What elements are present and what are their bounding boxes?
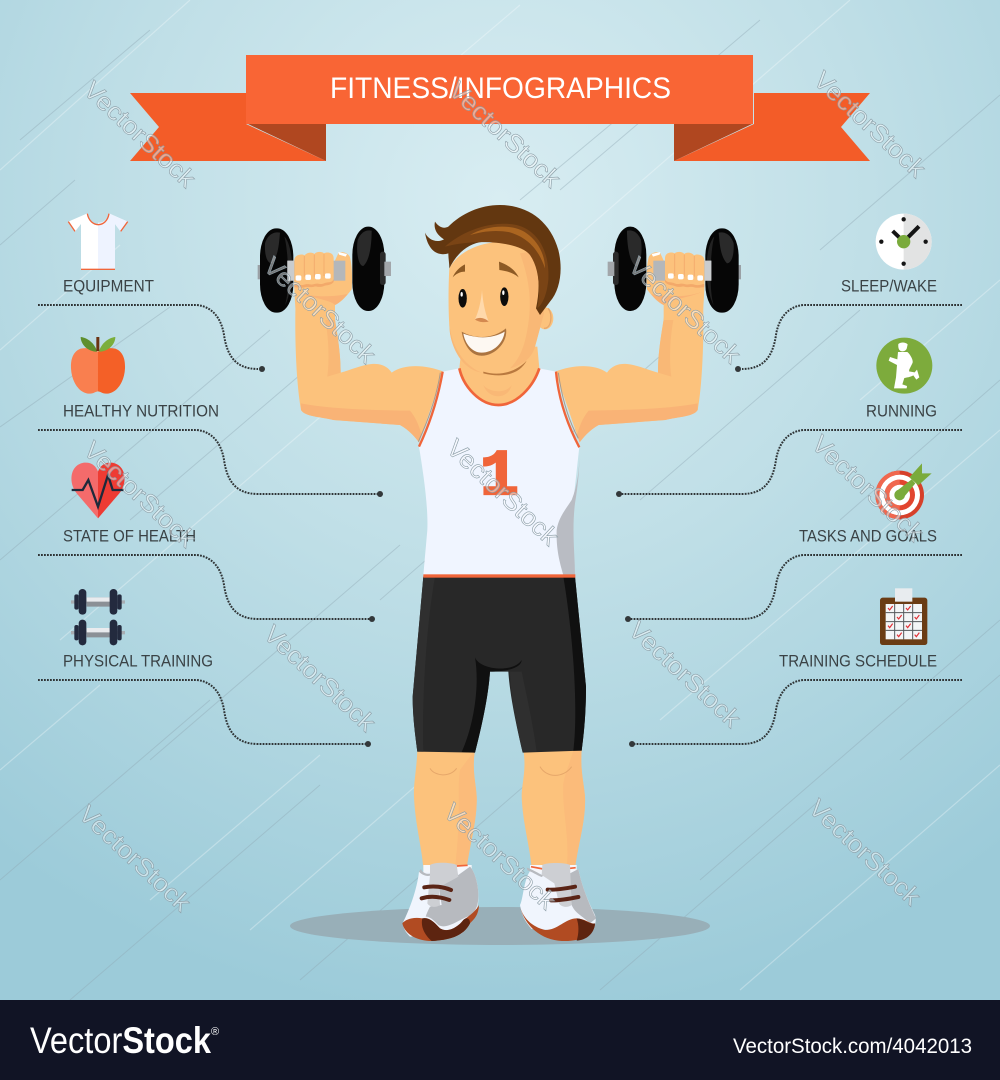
right column labels [779,278,937,670]
right shoe [520,863,596,941]
label: equipment: EQUIPMENT [63,278,154,296]
label: physical training: PHYSICAL TRAINING [63,652,213,670]
watermark: VectorStock [803,794,926,912]
watermark: VectorStock [258,252,381,370]
dumbbell handle [287,261,345,281]
connector end dots [259,366,741,747]
label: tasks and goals: TASKS AND GOALS [799,528,937,546]
label: state of health: STATE OF HEALTH [63,528,196,546]
icon: target with arrow [875,463,932,519]
watermark: VectorStock [441,434,564,552]
left sock [423,865,472,878]
footer image id: VectorStock.com/4042013 [733,1035,972,1058]
label: running: RUNNING [866,402,937,420]
head [425,205,561,375]
hair [425,205,561,315]
watermark: VectorStock [78,76,201,194]
dumbbell and hand [258,227,391,320]
shoes [402,863,596,941]
arm [295,300,443,442]
icon: apple [71,337,125,394]
face [449,242,544,374]
icon: t-shirt [68,213,128,270]
legs [414,750,585,868]
icon: clock [876,214,932,270]
footer bar [0,1000,1000,1080]
ribbon folds [248,124,752,161]
ear [537,307,553,329]
torso with singlet [418,347,579,578]
title text: FITNESS/INFOGRAPHICS [330,72,671,105]
left column labels [63,278,219,670]
right column icons [875,214,932,645]
watermark: VectorStock [443,76,566,194]
watermark: VectorStock [73,800,196,918]
eyes [458,289,467,308]
left column icons [68,213,128,645]
title ribbon [130,55,870,161]
shorts [413,577,586,753]
left shoe [402,863,479,941]
right sock [530,865,577,878]
ground shadow [290,907,710,945]
icon: heart with pulse [71,463,125,518]
shirt number: 1 [480,440,519,514]
watermark: VectorStock [623,616,746,734]
watermarks [73,66,931,918]
smile [462,328,506,356]
watermark: VectorStock [258,620,381,738]
palm and thumb [294,252,352,320]
nose [475,290,488,321]
athlete figure [258,205,741,941]
watermark: VectorStock [78,436,201,554]
icon: dumbbells [71,589,125,645]
icon: running figure [876,338,932,394]
label: training schedule: TRAINING SCHEDULE [779,652,937,670]
right raised arm with dumbbell (mirrored) [555,227,741,442]
neck fold [483,361,527,375]
watermark: VectorStock [806,430,929,548]
neck [459,347,539,405]
ribbon left tail [130,93,326,161]
watermark: VectorStock [623,252,746,370]
footer registered mark: ® [211,1026,219,1038]
connector lines [38,305,962,744]
watermark: VectorStock [438,798,561,916]
eyebrows [453,264,465,277]
fingers [294,252,334,285]
label: healthy nutrition: HEALTHY NUTRITION [63,402,219,420]
ribbon right tail [674,93,870,161]
icon: training schedule calendar [880,588,927,645]
footer logo: VectorStock [30,1020,211,1061]
left raised arm with dumbbell [258,227,443,442]
label: sleep/wake: SLEEP/WAKE [841,278,937,296]
ribbon main band [246,55,753,124]
watermark: VectorStock [808,66,931,184]
